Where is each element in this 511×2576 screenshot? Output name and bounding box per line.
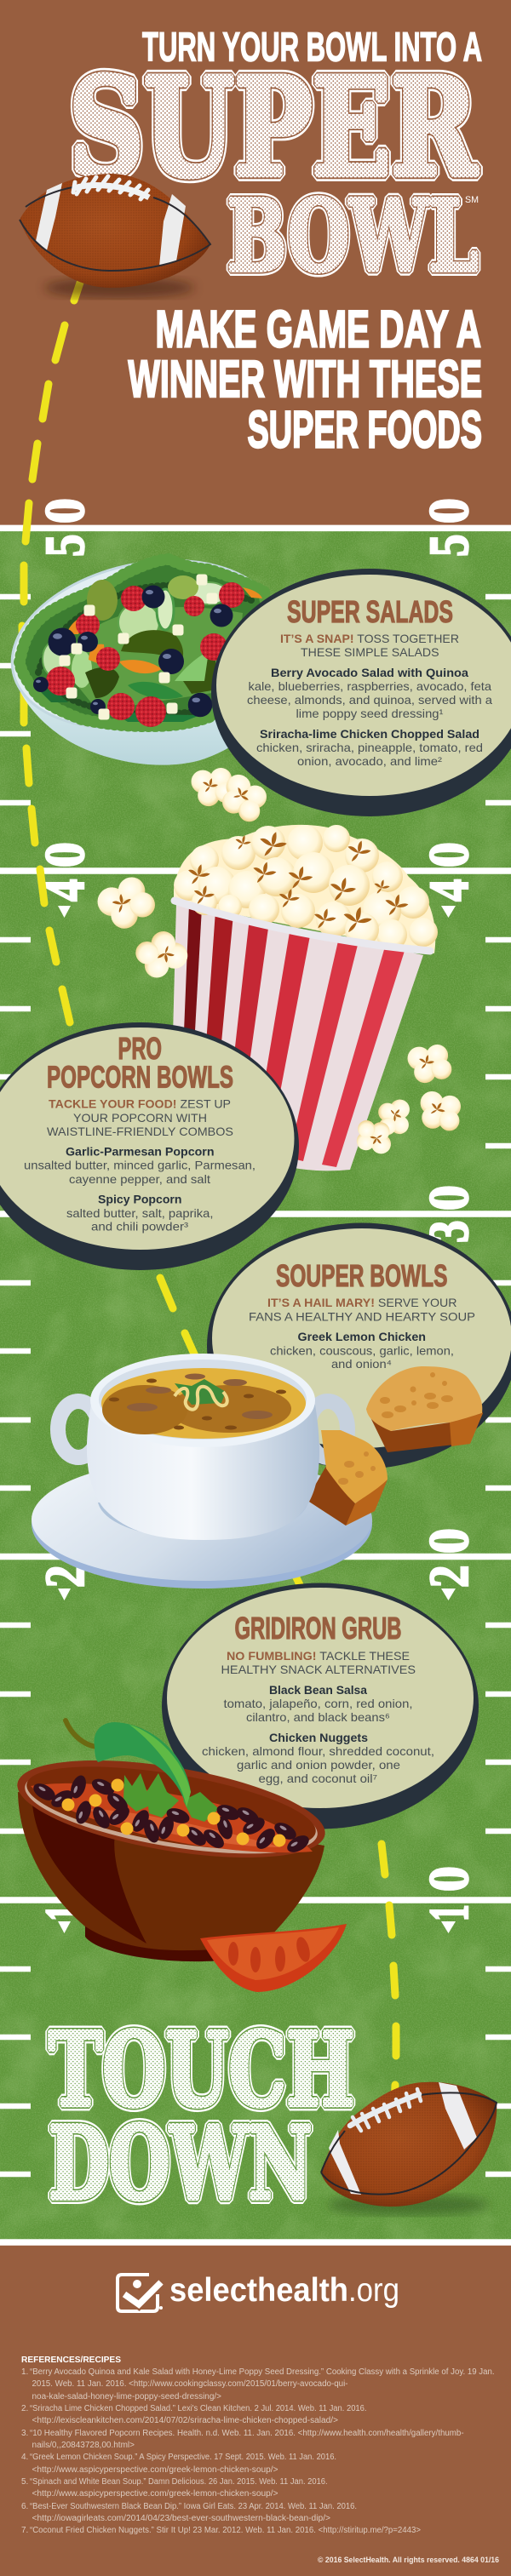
reference list: “Sriracha Lime Chicken Chopped Salad.” Lexi's Clean Kitchen. 2 Jul. 2014. Web. 11 Jan. 2016. [30, 2404, 366, 2413]
panel: pro popcorn bowls [0, 1022, 299, 1270]
copyright: © 2016 SelectHealth. All rights reserved. 4864 01/16 [318, 2556, 499, 2565]
logo: selecthealth.org [118, 2272, 399, 2311]
DOWN varsity lettering: DOWN [49, 2104, 312, 2222]
DOWN varsity lettering: DOWN [49, 2104, 312, 2222]
corn [61, 1779, 286, 1847]
DOWN varsity lettering: DOWN [49, 2104, 312, 2222]
yellow dashed route line [22, 283, 396, 2107]
panel: gridiron grub: cilantro, and black beans⁶ [246, 1711, 390, 1724]
grass field background [0, 528, 511, 2243]
salad greens [20, 559, 266, 726]
reference list: 4. [21, 2453, 28, 2462]
soup [101, 1368, 306, 1439]
panel: souper bowls: chicken, couscous, garlic, lemon, [270, 1345, 454, 1357]
panel: souper bowls [207, 1222, 511, 1469]
yard numbers: 0 [417, 1528, 480, 1554]
yard numbers: 0 [33, 1528, 96, 1554]
panel: gridiron grub: garlic and onion powder, one [237, 1759, 400, 1772]
reference list: 1. [21, 2367, 28, 2377]
bowl body [14, 596, 281, 765]
yard numbers: 4 [33, 879, 95, 902]
panel: super salads: cheese, almonds, and quinoa, served with a [247, 694, 492, 707]
tomato wedge [200, 1924, 347, 1992]
reference list: “Coconut Fried Chicken Nuggets.” Stir It Up! 23 Mar. 2012. Web. 11 Jan. 2016. <http://stiritup.me/?p=2443> [30, 2526, 421, 2535]
yard numbers: 0 [417, 498, 480, 524]
panel: super salads: onion, avocado, and lime² [297, 755, 443, 768]
recipe: spicy popcorn: Spicy Popcorn [98, 1194, 182, 1205]
icon: football bottom [321, 2082, 497, 2215]
beans [31, 1773, 312, 1856]
reference list [21, 2367, 495, 2535]
heading: GRIDIRON GRUB [235, 1611, 402, 1646]
yard numbers: 5 [417, 535, 479, 557]
panel: souper bowls: and onion⁴ [331, 1358, 392, 1371]
yard numbers: 1 [418, 1904, 480, 1921]
reference list: “Greek Lemon Chicken Soup.” A Spicy Perspective. 17 Sept. 2015. Web. 11 Jan. 2016. [30, 2453, 336, 2462]
subtitle [128, 300, 482, 458]
yard numbers: 0 [33, 842, 96, 867]
pepper stem [66, 1720, 96, 1747]
reference list: “Berry Avocado Quinoa and Kale Salad with Honey-Lime Poppy Seed Dressing.” Cooking Classy with a Sprinkle of Joy. 19 Jan. [30, 2367, 495, 2377]
TOUCH varsity lettering: TOUCH [49, 2011, 354, 2130]
garnish [175, 1379, 227, 1410]
reference list: 5. [21, 2477, 28, 2487]
reference list: <http://www.aspicyperspective.com/greek-lemon-chicken-soup/> [32, 2465, 278, 2475]
panel: pro popcorn bowls: cayenne pepper, and salt [69, 1173, 210, 1186]
cilantro [123, 1773, 219, 1822]
yard numbers: 0 [417, 842, 480, 867]
recipe: chicken nuggets: Chicken Nuggets [269, 1732, 368, 1744]
reference list: <http://lexiscleankitchen.com/2014/07/02/sriracha-lime-chicken-chopped-salad/> [32, 2416, 338, 2425]
logo: selecthealth.org: selecthealth [169, 2272, 348, 2309]
logo: selecthealth.org: .org [348, 2272, 399, 2309]
second bread slice [307, 1430, 388, 1526]
food: chili bowl with pepper [10, 1720, 347, 1992]
reference list: 3. [21, 2429, 28, 2438]
yard numbers: 0 [33, 498, 96, 524]
panel: pro popcorn bowls: unsalted butter, minced garlic, Parmesan, [24, 1159, 256, 1171]
yard numbers: 0 [417, 1185, 480, 1211]
panel: gridiron grub [162, 1583, 479, 1829]
intro: NO FUMBLING! TACKLE THESE [227, 1650, 410, 1663]
yard numbers: 3 [417, 1221, 479, 1243]
feta [60, 574, 218, 720]
yard numbers: 2 [33, 1566, 95, 1588]
intro: IT’S A SNAP! TOSS TOGETHER [280, 633, 459, 645]
intro: TACKLE YOUR FOOD! ZEST UP [49, 1098, 231, 1110]
reference list: 2015. Web. 11 Jan. 2016. <http://www.cookingclassy.com/2015/01/berry-avocado-qui- [32, 2379, 347, 2389]
reference list: nails/0,,20843728,00.html> [32, 2441, 135, 2450]
icon: football top [20, 174, 210, 298]
rim and chili [10, 1742, 332, 1876]
icon: check box [118, 2275, 163, 2311]
bowl handles [58, 1401, 99, 1457]
recipe: greek lemon: Greek Lemon Chicken [298, 1331, 426, 1343]
reference list: 7. [21, 2526, 28, 2535]
panel: gridiron grub: chicken, almond flour, shredded coconut, [202, 1745, 434, 1758]
panel: pro popcorn bowls: POPCORN BOWLS [47, 1059, 233, 1095]
yard numbers: 4 [417, 879, 479, 902]
panel: super salads: kale, blueberries, raspberries, avocado, feta [249, 680, 491, 693]
reference list: <http://iowagirleats.com/2014/04/23/best-ever-southwestern-black-bean-dip/> [32, 2514, 330, 2523]
berries [33, 582, 244, 727]
panel: super salads: chicken, sriracha, pineapple, tomato, red [256, 741, 483, 754]
reference list: “10 Healthy Flavored Popcorn Recipes. Health. n.d. Web. 11. Jan. 2016. <http://www.health.com/health/gallery/thumb- [30, 2429, 464, 2438]
yard numbers [33, 498, 480, 1933]
bowl body [18, 1792, 324, 1950]
yard numbers: 0 [417, 1866, 480, 1892]
rim [90, 1354, 315, 1447]
food: popcorn tub [170, 825, 438, 1171]
TOUCH varsity lettering: TOUCH [49, 2011, 354, 2130]
bowl foot [98, 1503, 308, 1539]
reference list: “Spinach and White Bean Soup.” Damn Delicious. 26 Jan. 2015. Web. 11 Jan. 2016. [30, 2477, 328, 2487]
recipe: sriracha: Sriracha-lime Chicken Chopped Salad [260, 728, 479, 741]
panel: gridiron grub: HEALTHY SNACK ALTERNATIVES [221, 1663, 416, 1676]
brown header background [0, 0, 511, 528]
panel: souper bowls: FANS A HEALTHY AND HEARTY SOUP [249, 1311, 475, 1323]
panel: super salads: lime poppy seed dressing¹ [296, 707, 444, 720]
brown footer background [0, 2242, 511, 2576]
bowl base [85, 1920, 230, 1961]
tub rim [175, 901, 430, 951]
yard numbers: 1 [34, 1904, 96, 1921]
recipe: berry avocado: Berry Avocado Salad with Quinoa [271, 667, 468, 679]
panel: gridiron grub: egg, and coconut oil⁷ [259, 1772, 377, 1785]
food: salad bowl [0, 537, 293, 765]
panel: super salads [211, 569, 511, 816]
bowl body [87, 1405, 319, 1540]
yard numbers: 2 [417, 1566, 479, 1588]
reference list: “Best-Ever Southwestern Black Bean Dip.” Iowa Girl Eats. 23 Apr. 2014. Web. 11 Jan. 2016. [30, 2502, 357, 2511]
yard lines and hash marks [0, 528, 511, 2242]
panel: super salads: THESE SIMPLE SALADS [301, 646, 439, 659]
reference list: <http://www.aspicyperspective.com/greek-lemon-chicken-soup/> [32, 2489, 278, 2499]
popped corn [174, 825, 438, 953]
plate [32, 1459, 372, 1589]
panel: pro popcorn bowls: salted butter, salt, paprika, [66, 1207, 213, 1220]
recipe: black bean salsa: Black Bean Salsa [269, 1684, 367, 1697]
heading: PRO [118, 1031, 162, 1066]
panel: pro popcorn bowls: YOUR POPCORN WITH [73, 1112, 207, 1125]
panel: gridiron grub: tomato, jalapeño, corn, red onion, [223, 1697, 412, 1710]
recipe: garlic parmesan: Garlic-Parmesan Popcorn [66, 1146, 214, 1158]
panel: pro popcorn bowls: and chili powder³ [91, 1221, 189, 1233]
panel: pro popcorn bowls: WAISTLINE-FRIENDLY COMBOS [47, 1125, 233, 1138]
tub body [170, 902, 423, 1171]
service mark: SM [465, 195, 479, 205]
cucumbers and avocado [38, 575, 262, 722]
references heading: REFERENCES/RECIPES [21, 2355, 121, 2365]
yard numbers: 5 [33, 535, 95, 557]
reference list: 2. [21, 2404, 28, 2413]
DOWN varsity lettering [49, 2104, 312, 2222]
references [21, 2355, 495, 2535]
reference list: noa-kale-salad-honey-lime-poppy-seed-dressing/> [32, 2392, 221, 2401]
food: soup bowl with plate [32, 1354, 388, 1589]
food: bread slice on panel [366, 1366, 483, 1452]
popcorn kernels [93, 768, 468, 1159]
reference list: 6. [21, 2502, 28, 2511]
intro: IT’S A HAIL MARY! SERVE YOUR [267, 1297, 457, 1309]
jalapeño pepper [94, 1722, 191, 1807]
TOUCH varsity lettering: TOUCH [49, 2011, 354, 2130]
